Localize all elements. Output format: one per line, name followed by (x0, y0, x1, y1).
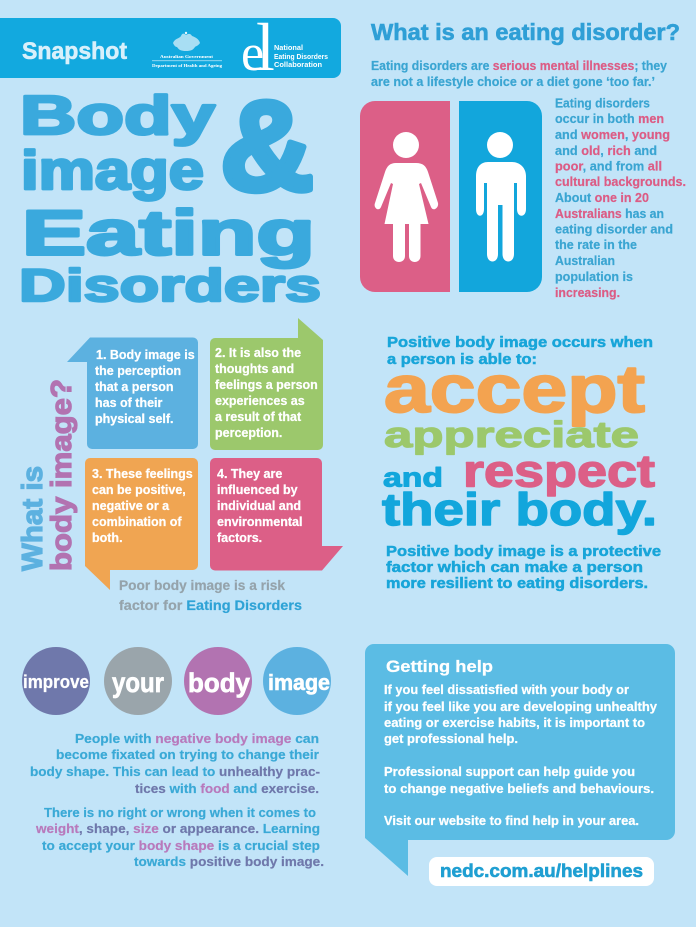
paragraph: who is affected: poor, and from all (555, 160, 662, 174)
help body text: If you feel dissatisfied with your body or (384, 682, 629, 697)
main title: Body (20, 84, 216, 146)
panel: speech bubble 3: both. (92, 531, 123, 545)
panel: speech bubble 3: negative or a (92, 499, 170, 513)
paragraph: negative body image: body shape. This can lead to unhealthy prac- (30, 764, 320, 779)
header banner (0, 9, 341, 85)
paragraph: negative body image: People with negative body image can (75, 731, 319, 746)
risk factor note: factor for Eating Disorders (119, 598, 302, 613)
paragraph: no right or wrong: weight, shape, size or appearance. Learning (35, 821, 320, 836)
paragraph: who is affected: cultural backgrounds. (555, 175, 686, 189)
paragraph: no right or wrong: to accept your body shape is a crucial step (42, 838, 320, 853)
panel: speech bubble 4: factors. (217, 531, 262, 545)
main title (19, 75, 321, 311)
panel: speech bubble 1: has of their (95, 396, 163, 410)
panel: speech bubble 4: 4. They are (217, 467, 282, 481)
paragraph: who is affected: eating disorder and (555, 222, 673, 236)
Snapshot label: Snapshot (22, 38, 127, 65)
paragraph: who is affected (555, 96, 686, 300)
help body text: Professional support can help guide you (384, 764, 635, 779)
intro text (371, 59, 667, 89)
risk factor note (119, 578, 302, 613)
icon: NEDC logo: e (241, 25, 264, 82)
help body text: if you feel like you are developing unhealthy (384, 699, 658, 714)
circle: your (104, 647, 172, 715)
icon: NEDC logo (241, 9, 328, 85)
panel: speech bubble 2: experiences as (215, 394, 305, 408)
panel: speech bubble 2: perception. (215, 426, 282, 440)
panel: speech bubble 4: environmental (217, 515, 302, 529)
icon: Australian Government crest and name (152, 32, 223, 68)
panel: speech bubble 1: that a person (95, 380, 174, 394)
positive body image intro: a person is able to: (387, 352, 537, 368)
intro text: are not a lifestyle choice or a diet gone ‘too far.’ (371, 75, 655, 89)
icon: NEDC logo: Eating Disorders (274, 52, 328, 61)
main title: & (220, 75, 314, 218)
paragraph: no right or wrong: There is no right or wrong when it comes to (44, 805, 316, 820)
help body text: eating or exercise habits, it is important to (384, 715, 645, 730)
panel: speech bubble 2: 2. It is also the (215, 346, 301, 360)
main title: Disorders (19, 260, 321, 311)
paragraph: who is affected: Australians has an (555, 207, 664, 221)
circle: improve (22, 647, 90, 715)
panel: speech bubble 1: physical self. (95, 412, 174, 426)
big statement: accept appreciate respect (382, 352, 657, 535)
circle: body (184, 647, 252, 715)
paragraph: who is affected: and old, rich and (555, 144, 657, 158)
paragraph: negative body image (30, 731, 320, 796)
big statement: accept appreciate respect: respect (463, 446, 655, 496)
circle: body: body (188, 668, 250, 698)
main title: Eating (22, 198, 315, 268)
panel: speech bubble 1 (67, 338, 198, 449)
panel: speech bubble 2: feelings a person (215, 378, 318, 392)
panel: speech bubble 2: a result of that (215, 410, 302, 424)
heading: getting help: Getting help (386, 657, 493, 676)
help body text (384, 682, 658, 828)
main title: image (21, 139, 204, 201)
paragraph: who is affected: About one in 20 (555, 191, 649, 205)
website link box: nedc.com.au/helplines (440, 860, 643, 881)
circle: image (263, 647, 331, 715)
icon: woman (375, 132, 438, 262)
icon: NEDC logo: l (256, 9, 275, 85)
paragraph: who is affected: Eating disorders (555, 96, 650, 110)
help body text: to change negative beliefs and behaviours. (384, 781, 654, 796)
paragraph: who is affected: and women, young (555, 128, 670, 142)
circle: your: your (112, 667, 164, 698)
help body text: Visit our website to find help in your area. (384, 813, 639, 828)
panel: male figure (459, 101, 542, 292)
panel: speech bubble 1: the perception (95, 364, 181, 378)
panel: speech bubble 3: combination of (92, 515, 182, 529)
paragraph: who is affected: population is (555, 270, 633, 284)
paragraph: who is affected: the rate in the (555, 238, 637, 252)
panel: speech bubble 4 (210, 458, 343, 570)
website link box (429, 857, 654, 886)
panel: getting help speech bubble (365, 644, 675, 876)
positive body image intro (387, 335, 653, 368)
protective factor text: more resilient to eating disorders. (386, 576, 648, 592)
panel: speech bubble 3 (85, 458, 198, 590)
panel: speech bubble 4: individual and (217, 499, 301, 513)
icon: NEDC logo: Collaboration (274, 60, 322, 69)
icon: Australian Government crest and name: Department of Health and Ageing (152, 63, 223, 68)
panel: female figure (360, 101, 450, 292)
heading: what is an eating disorder: What is an eating disorder? (371, 19, 680, 45)
panel: speech bubble 4: influenced by (217, 483, 298, 497)
protective factor text: Positive body image is a protective (386, 544, 661, 560)
paragraph: who is affected: Australian (555, 254, 615, 268)
big statement: accept appreciate respect: accept (384, 352, 645, 427)
rotated heading: what is body image: What is (17, 466, 49, 571)
circle: image: image (268, 670, 330, 695)
big statement: accept appreciate respect: their body. (382, 484, 657, 535)
panel: speech bubble 2 (210, 318, 323, 450)
positive body image intro: Positive body image occurs when (387, 335, 653, 351)
paragraph: who is affected: increasing. (555, 286, 620, 300)
rotated heading: what is body image (17, 379, 78, 571)
big statement: accept appreciate respect: and (383, 462, 443, 492)
paragraph: negative body image: become fixated on trying to change their (56, 747, 319, 762)
icon: NEDC logo: National (274, 43, 303, 52)
big statement: accept appreciate respect: appreciate (384, 414, 639, 455)
intro text: Eating disorders are serious mental illnesses; they (371, 59, 667, 73)
panel: speech bubble 3: 3. These feelings (92, 467, 193, 481)
paragraph: who is affected: occur in both men (555, 112, 664, 126)
circle: improve: improve (23, 672, 89, 692)
panel: speech bubble 1: 1. Body image is (96, 348, 195, 362)
paragraph: no right or wrong: towards positive body image. (134, 854, 324, 869)
paragraph: no right or wrong (35, 805, 324, 869)
protective factor text: factor which can make a person (386, 560, 643, 576)
protective factor text (386, 544, 661, 592)
paragraph: negative body image: tices with food and exercise. (135, 781, 319, 796)
panel: speech bubble 2: thoughts and (215, 362, 294, 376)
panel: speech bubble 3: can be positive, (92, 483, 186, 497)
risk factor note: Poor body image is a risk (119, 578, 285, 593)
icon: Australian Government crest and name: Australian Government (160, 54, 214, 59)
rotated heading: what is body image: body image? (46, 379, 78, 571)
help body text: get professional help. (384, 731, 518, 746)
icon: man (476, 132, 526, 262)
